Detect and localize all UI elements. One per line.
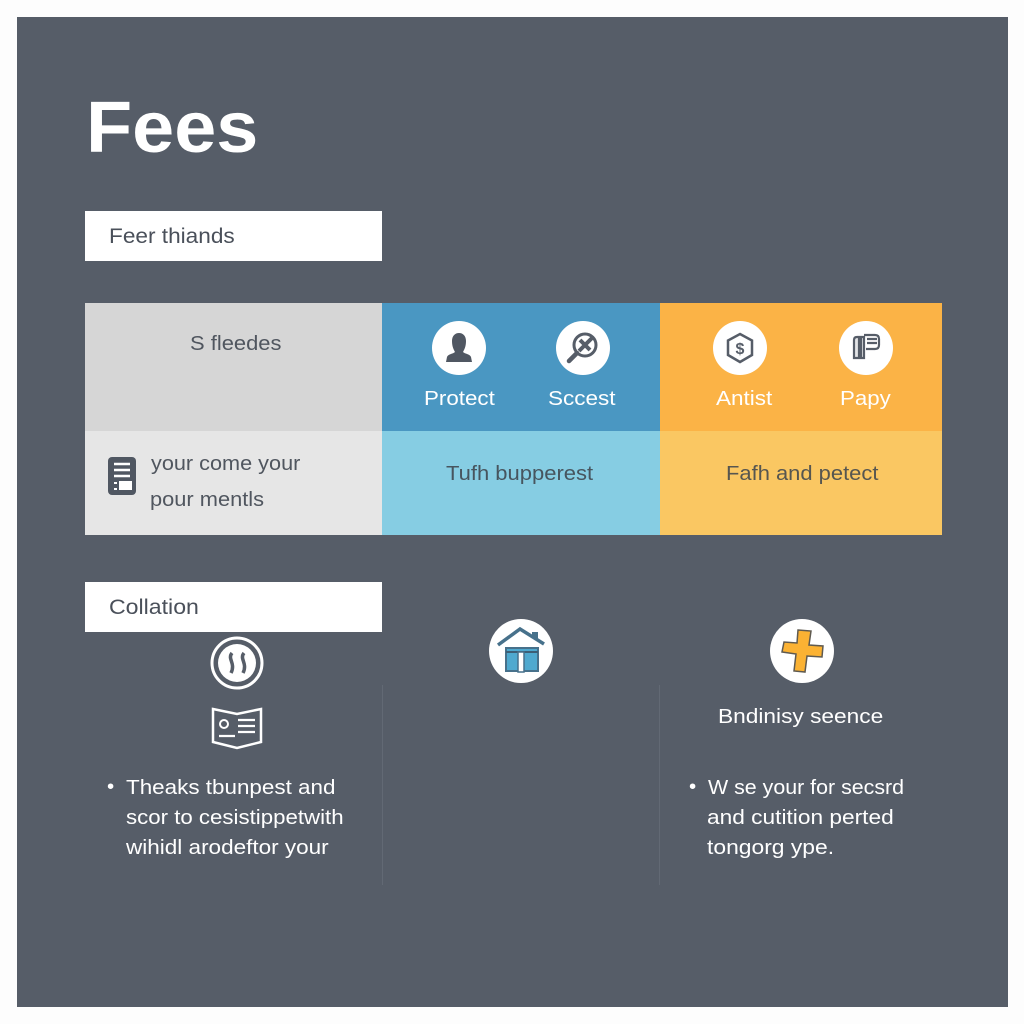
- cell: blue header: [382, 303, 660, 431]
- text block: left bullets: Theaks tbunpest and: [126, 776, 335, 799]
- icon: person: [432, 321, 486, 375]
- text block: left bullets: wihidl arodeftor your: [126, 836, 329, 859]
- text: pour mentls: pour mentls: [150, 488, 264, 511]
- text block: left bullets: scor to cesistippetwith: [126, 806, 344, 829]
- icon: search tool: [556, 321, 610, 375]
- icon: dollar hexagon: $: [736, 341, 745, 358]
- cell: light orange row: [660, 431, 942, 535]
- label: Protect: Protect: [424, 387, 495, 410]
- label: Papy: Papy: [840, 387, 891, 410]
- cell: light grey row: [85, 431, 382, 535]
- icon: house: [489, 619, 553, 683]
- cell: light blue row: Tufh bupperest: [446, 462, 593, 485]
- heading: Feer thiands: [85, 211, 382, 261]
- icon: open book: [212, 708, 262, 750]
- cell: grey header: S fleedes: [190, 332, 281, 355]
- heading: Collation: Collation: [109, 596, 199, 619]
- label: Sccest: Sccest: [548, 387, 616, 410]
- cell: orange header: [660, 303, 942, 431]
- text block: right bullets: and cutition perted: [707, 806, 894, 829]
- icon: document: [108, 457, 136, 495]
- icon: card: [839, 321, 893, 375]
- cell: light orange row: Fafh and petect: [726, 462, 878, 485]
- cell: grey header: [85, 303, 382, 431]
- text block: left bullets: •: [107, 775, 114, 798]
- panel: fee table: [85, 303, 942, 535]
- label: Antist: Antist: [716, 387, 772, 410]
- label: Bndinisy seence: Bndinisy seence: [718, 705, 883, 728]
- heading: Collation: [85, 582, 382, 632]
- icon: plus: [770, 619, 834, 683]
- text block: right bullets: W se your for secsrd: [708, 776, 904, 799]
- text block: left bullets: [107, 775, 344, 859]
- text block: right bullets: [689, 775, 904, 859]
- icon: ring with waves: [210, 636, 264, 690]
- title: Fees: [86, 88, 258, 168]
- text block: right bullets: •: [689, 775, 696, 798]
- text block: right bullets: tongorg ype.: [707, 836, 834, 859]
- text: your come your: your come your: [151, 452, 300, 475]
- cell: light blue row: [382, 431, 660, 535]
- heading: Feer thiands: Feer thiands: [109, 225, 235, 248]
- icon: dollar hexagon: [713, 321, 767, 375]
